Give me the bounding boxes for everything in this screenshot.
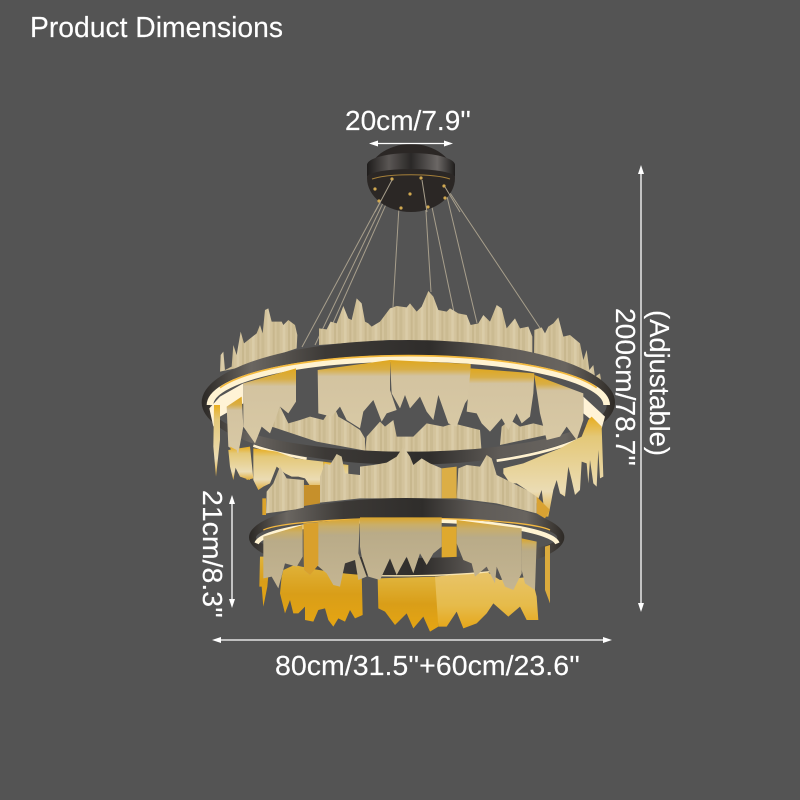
upper tier: far panels above ring xyxy=(220,291,601,380)
upper tier: rear panel row xyxy=(272,405,547,453)
label: shade height: 21cm/8.3'' xyxy=(197,490,228,618)
upper tier: right lower strips xyxy=(503,417,603,517)
upper tier: left lower strips xyxy=(228,447,348,490)
upper ring band xyxy=(202,340,615,465)
height arrow: overall xyxy=(638,165,644,612)
width arrow: overall xyxy=(212,637,612,643)
upper tier: front hanging panels xyxy=(213,360,583,480)
width arrow: canopy xyxy=(369,140,453,146)
label: adjustable: (Adjustable) xyxy=(644,310,675,456)
lower tier: front hanging panels xyxy=(263,517,550,603)
label: overall height: 200cm/78.7'' xyxy=(610,308,641,466)
suspension wires xyxy=(302,180,540,347)
ceiling canopy xyxy=(367,144,460,212)
lower tier: gold back panels xyxy=(259,527,538,632)
height arrow: shade xyxy=(229,495,235,608)
lower ring band xyxy=(249,498,564,577)
label: canopy diameter: 20cm/7.9'' xyxy=(345,105,471,136)
lower tier: far panels above ring xyxy=(262,447,550,518)
label: ring diameters: 80cm/31.5''+60cm/23.6'' xyxy=(275,650,580,681)
title: Product Dimensions xyxy=(30,11,283,43)
